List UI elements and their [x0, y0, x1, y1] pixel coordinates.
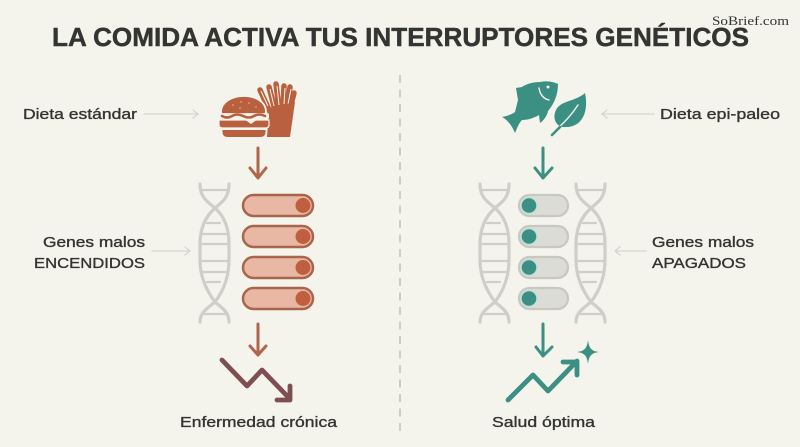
- toggle 4: [519, 288, 568, 309]
- toggle 3: [519, 257, 568, 278]
- toggle 3: [243, 257, 313, 278]
- title: LA COMIDA ACTIVA TUS INTERRUPTORES GENÉTICOS: [52, 23, 749, 52]
- label: dieta epi-paleo: Dieta epi-paleo: [660, 106, 780, 123]
- label: salud óptima: Salud óptima: [492, 414, 596, 431]
- center divider: [399, 75, 401, 431]
- watermark: SoBrief.com: [712, 13, 789, 28]
- icon: declining trend: [222, 360, 290, 400]
- label: dieta estándar: Dieta estándar: [23, 106, 137, 123]
- arrow: food to genes: [250, 148, 266, 178]
- icon: dna left: [200, 184, 229, 322]
- toggle 2: [519, 226, 568, 247]
- panel: standard diet: [23, 84, 338, 431]
- icon: sparkle: [577, 340, 599, 364]
- icon: dna center: [480, 184, 509, 322]
- label: genes malos encendidos: [34, 234, 145, 272]
- toggle 1: [243, 195, 313, 216]
- toggles: off: [519, 195, 568, 309]
- arrow: label to dna: [615, 247, 646, 255]
- arrow: genes to outcome: [536, 324, 552, 356]
- icon: fish: [502, 81, 558, 133]
- arrow: label to food: [144, 110, 198, 118]
- arrow: food to genes: [535, 148, 552, 178]
- toggle 4: [243, 288, 313, 309]
- label: genes malos encendidos: ENCENDIDOS: [34, 255, 145, 272]
- arrow: label to dna: [152, 247, 190, 255]
- icon: burger and fries: [219, 84, 295, 138]
- label: genes malos apagados: Genes malos: [652, 234, 754, 251]
- panel: epi-paleo diet: [480, 81, 780, 431]
- label: genes malos apagados: APAGADOS: [652, 255, 746, 272]
- toggle 1: [519, 195, 568, 216]
- label: enfermedad crónica: Enfermedad crónica: [180, 414, 338, 431]
- label: genes malos apagados: [652, 234, 754, 272]
- arrow: genes to outcome: [250, 324, 266, 355]
- toggles: on: [243, 195, 313, 309]
- icon: dna right: [576, 184, 605, 322]
- toggle 2: [243, 226, 313, 247]
- arrow: label to food: [602, 110, 654, 118]
- icon: rising trend: [508, 361, 577, 400]
- icon: leaf: [552, 93, 586, 135]
- label: genes malos encendidos: Genes malos: [43, 234, 145, 251]
